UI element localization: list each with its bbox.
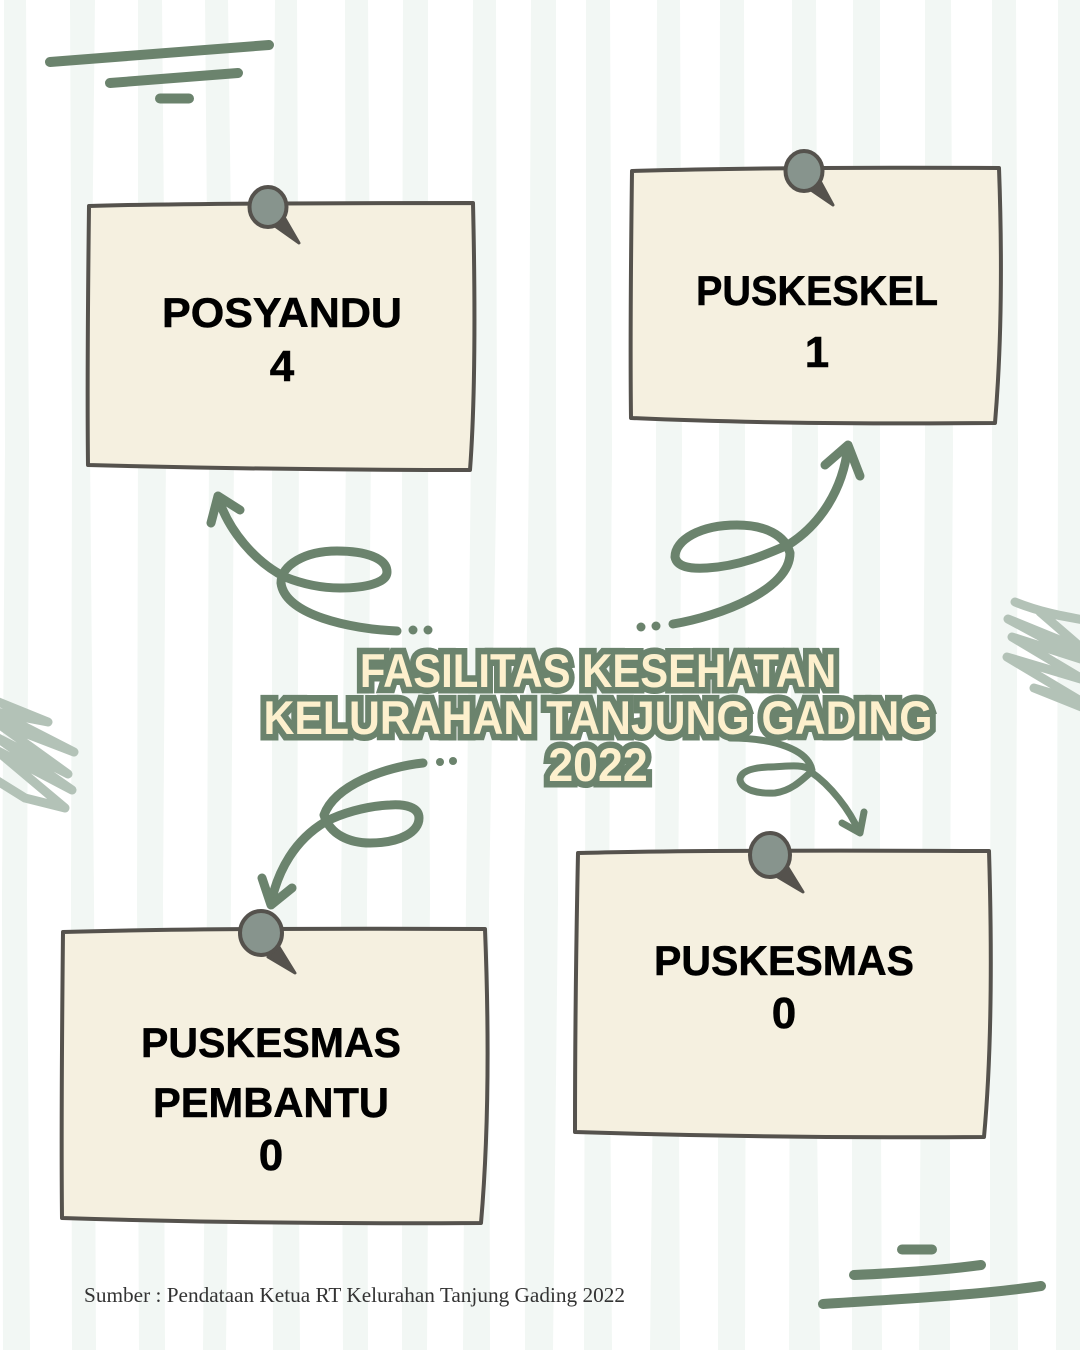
title xyxy=(263,646,933,791)
value: Puskesmas: 0 xyxy=(772,989,796,1038)
arrow: to Puskeskel xyxy=(636,445,860,632)
arrow: to Posyandu xyxy=(211,496,432,634)
heading: Puskesmas: PUSKESMAS xyxy=(654,937,914,984)
title: KELURAHAN TANJUNG GADING xyxy=(263,691,933,744)
arrow: to Puskesmas xyxy=(730,738,864,833)
heading: Posyandu: POSYANDU xyxy=(162,289,402,336)
scribble: left edge xyxy=(0,701,74,808)
value: Puskeskel: 1 xyxy=(805,328,829,377)
heading: Puskeskel: PUSKESKEL xyxy=(696,267,938,314)
decorative lines: bottom right xyxy=(823,1250,1041,1304)
source note: Sumber : Pendataan Ketua RT Kelurahan Tanjung Gading 2022 xyxy=(84,1283,625,1307)
title: 2022 xyxy=(548,739,648,791)
icon: pin xyxy=(240,911,295,973)
panel: Puskesmas Pembantu xyxy=(62,911,488,1223)
panel: Posyandu xyxy=(88,187,475,470)
panel: Puskeskel xyxy=(631,151,1001,423)
panel: Puskesmas Pembantu: PEMBANTU xyxy=(153,1079,389,1126)
value: Posyandu: 4 xyxy=(270,342,295,391)
title: FASILITAS KESEHATAN xyxy=(360,646,836,698)
arrow: to Puskesmas Pembantu xyxy=(262,757,457,905)
panel: Puskesmas xyxy=(575,833,991,1137)
value: Puskesmas Pembantu: 0 xyxy=(259,1131,283,1180)
icon: pin xyxy=(786,151,833,205)
scribble: right edge xyxy=(1007,602,1080,708)
icon: pin xyxy=(750,833,803,892)
heading: Puskesmas Pembantu: PUSKESMAS xyxy=(141,1019,401,1066)
icon: pin xyxy=(250,187,299,243)
decorative lines: top left xyxy=(50,45,269,98)
